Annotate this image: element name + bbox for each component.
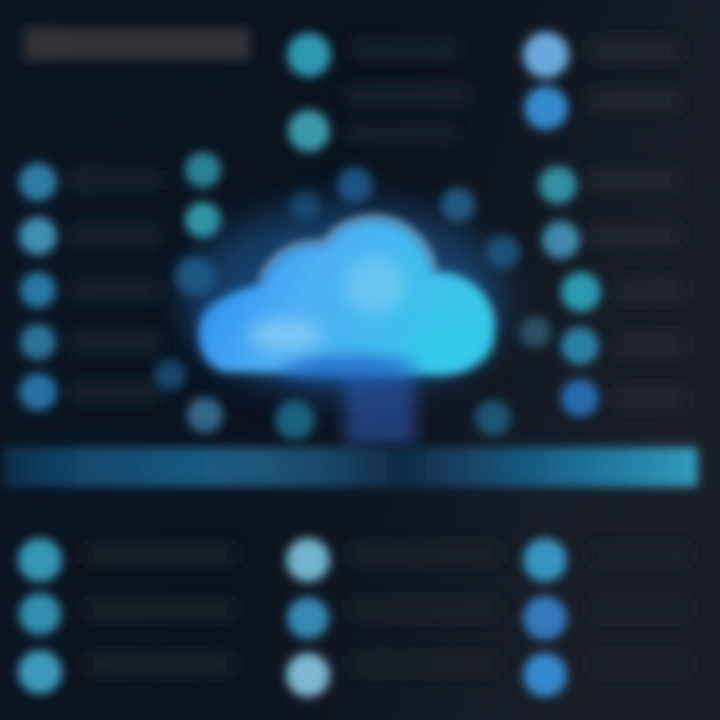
panel: left list text [70,170,160,402]
bottom centre icons [286,538,330,697]
cloud rim light [262,219,432,282]
top right icons [523,32,569,130]
second icon column [175,152,221,296]
cloud glow [185,205,505,395]
cloud [198,219,495,375]
panel: top centre text [345,40,470,141]
panel: right list text [590,40,685,408]
cloud stem [345,375,415,445]
scattered icons around cloud [154,167,551,440]
bottom left icons [18,538,62,694]
horizontal band [4,447,698,487]
panel: bottom list text [85,545,690,673]
title bar [24,28,250,60]
cloud highlights [249,257,490,380]
bottom right icons [523,538,567,697]
right icon column [539,166,601,417]
top centre icons [287,33,331,152]
left icon column [19,163,57,411]
